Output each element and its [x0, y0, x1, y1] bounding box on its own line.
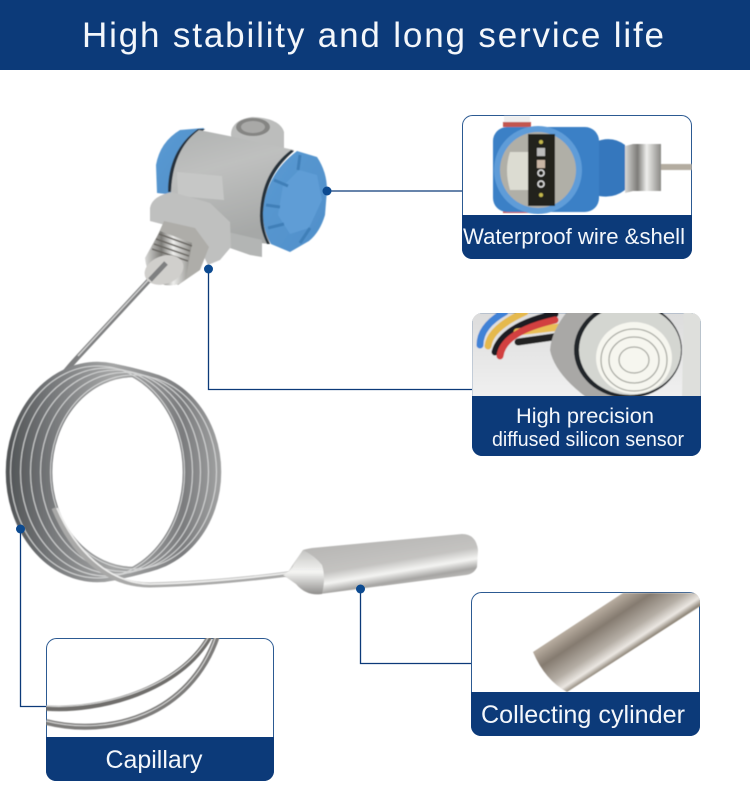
title banner: High stability and long service life: [82, 16, 664, 55]
caption bar: [46, 737, 274, 781]
product: capillary coil: [9, 262, 296, 585]
connector: fitting to sensor card: [204, 264, 473, 390]
right blue cover: [263, 151, 327, 252]
title banner: [0, 0, 750, 70]
photo: diffused silicon sensor: [472, 313, 701, 396]
threaded fitting: [146, 221, 209, 285]
product: transmitter housing: [140, 117, 327, 290]
panel: silicon sensor: [472, 300, 701, 456]
left blue cover: [156, 128, 204, 195]
caption text: High precision: [516, 405, 654, 428]
caption text: Waterproof wire &shell: [463, 224, 685, 249]
caption bar: [471, 692, 700, 736]
panel: collecting cylinder: [471, 592, 702, 736]
panel: capillary: [46, 636, 274, 781]
connector: cylinder to collecting card: [356, 584, 472, 664]
icon: top conduit port: [231, 117, 284, 150]
photo: opened blue housing: [493, 116, 692, 214]
caption bar: [462, 215, 692, 259]
panel: silicon sensor: diffused silicon sensor: [492, 429, 684, 451]
connector: coil to capillary card: [16, 524, 47, 706]
caption bar: [472, 396, 701, 456]
product: collecting cylinder: [283, 534, 478, 594]
caption text: Collecting cylinder: [481, 701, 685, 729]
photo: cylinder close-up: [533, 593, 702, 692]
caption text: Capillary: [106, 746, 203, 774]
bracket and neck: [177, 172, 224, 200]
main body: [171, 130, 294, 244]
panel: waterproof wire and shell: [462, 116, 692, 259]
connector: shell to waterproof card: [322, 186, 463, 196]
bottom tab: [228, 232, 262, 257]
photo: capillary close-up: [46, 636, 217, 727]
